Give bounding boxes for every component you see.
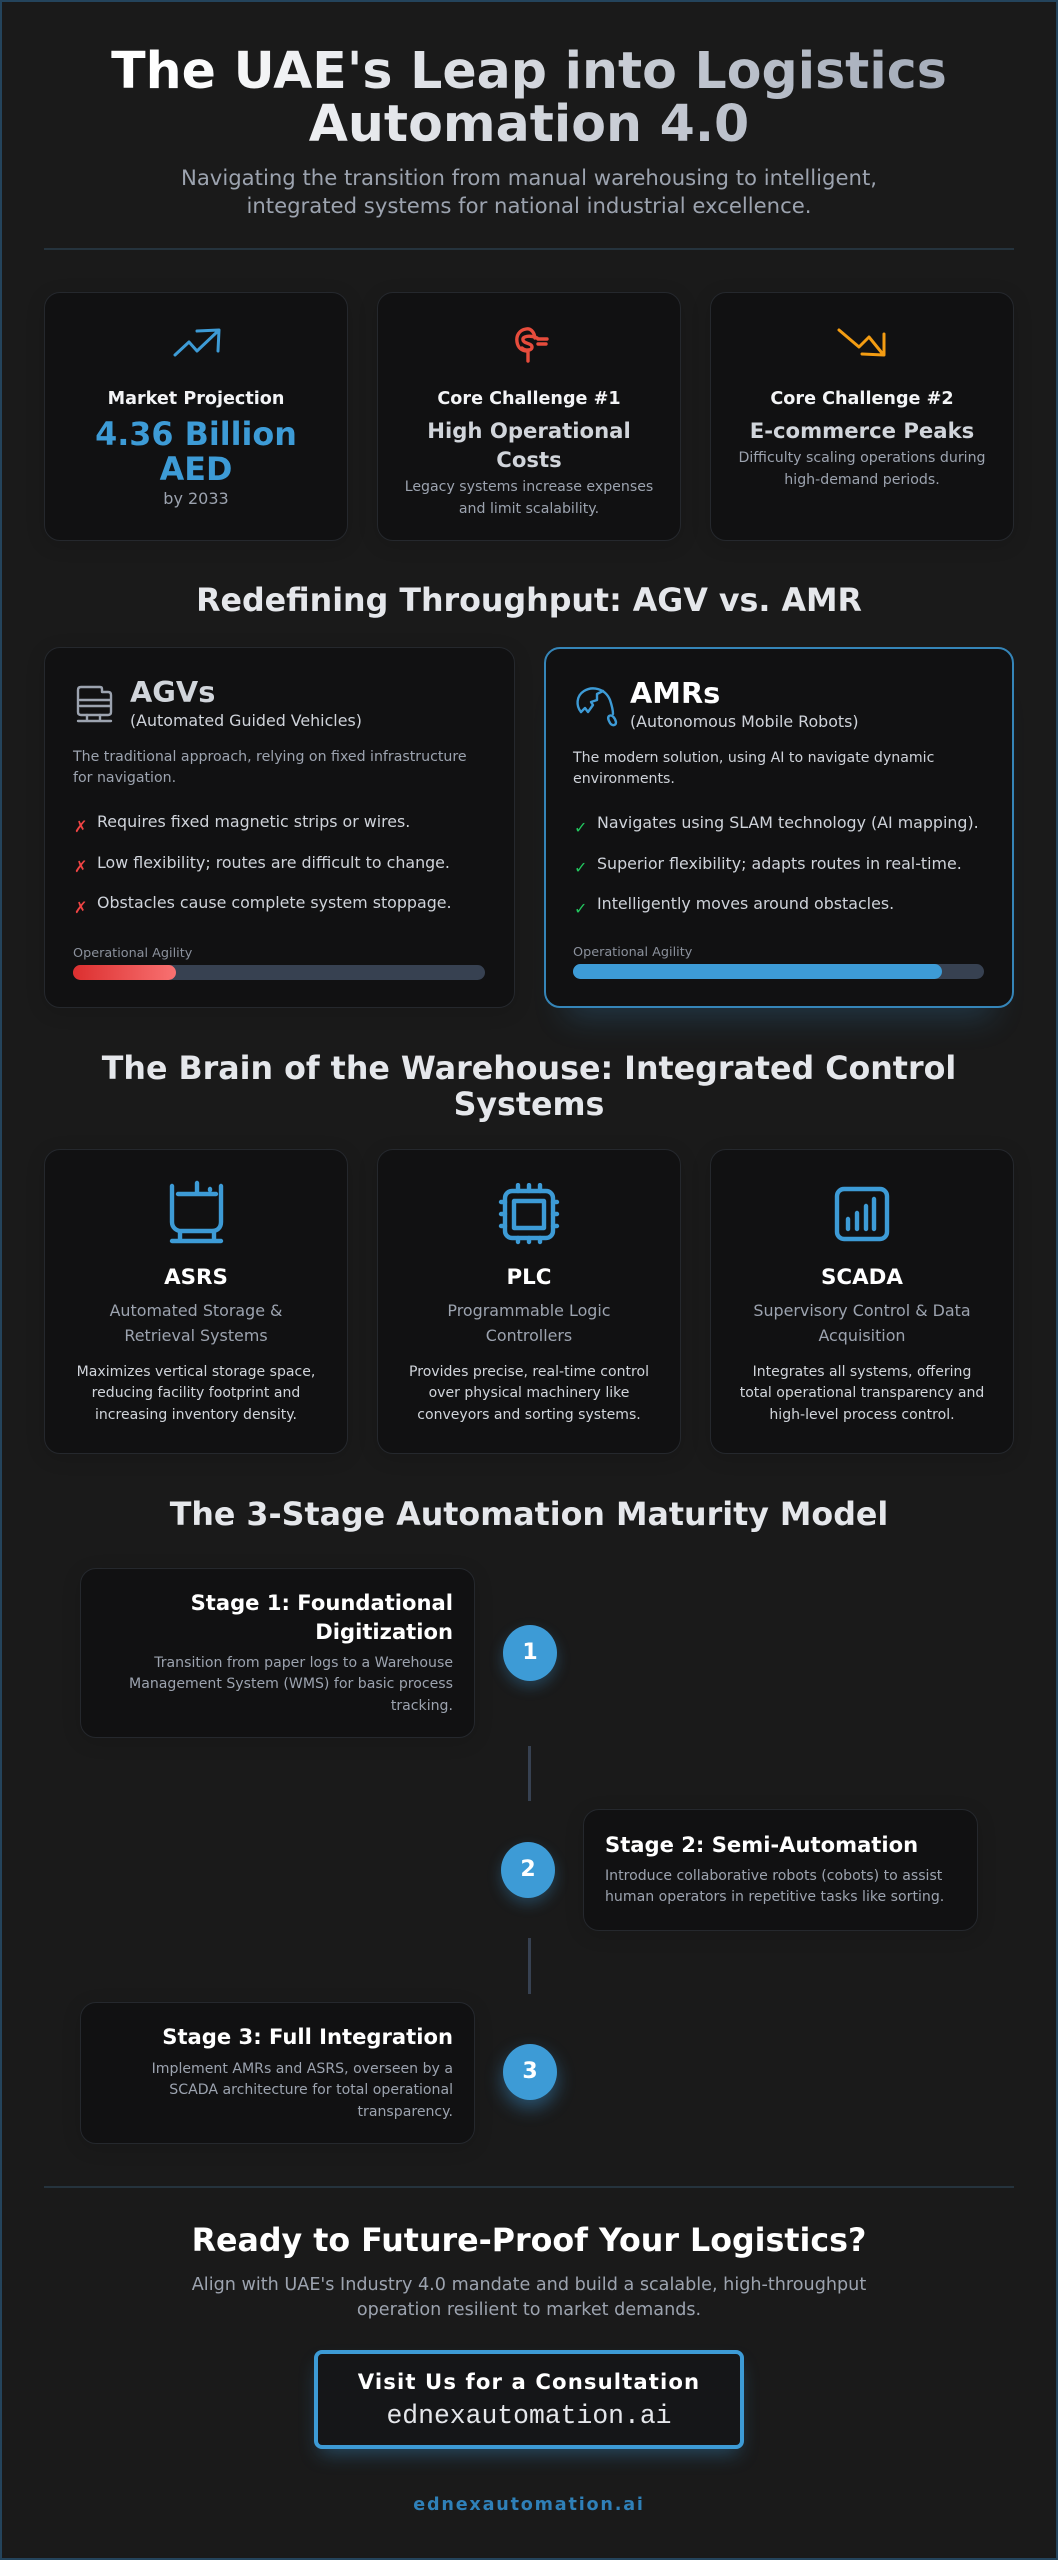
full name: (Automated Guided Vehicles) <box>130 711 362 730</box>
panel: stage 3 <box>80 2002 475 2144</box>
stage title <box>191 1590 453 1644</box>
description: Difficulty scaling operations during <box>738 450 986 466</box>
value: 4.36 Billion <box>95 416 297 453</box>
section: call to action <box>192 2223 866 2515</box>
list: limitations: Low flexibility; routes are difficult to change. <box>97 853 450 872</box>
icon: AGV <box>76 686 112 722</box>
panel: core challenge 2 <box>710 292 1014 541</box>
panel: AMRs <box>544 647 1014 1008</box>
list: benefits: ✓ <box>574 899 587 918</box>
icon: ASRS <box>170 1180 224 1244</box>
stage title: Stage 3: Full Integration <box>162 2024 453 2049</box>
CTA button <box>314 2350 744 2449</box>
heading: maturity model: The 3-Stage Automation Maturity Model <box>170 1497 888 1533</box>
full name: (Autonomous Mobile Robots) <box>630 712 859 731</box>
headline: Costs <box>496 447 562 472</box>
stage description: human operators in repetitive tasks like sorting. <box>605 1889 944 1905</box>
panel: ASRS <box>44 1149 348 1454</box>
description: for navigation. <box>73 770 176 786</box>
stage description: transparency. <box>358 2104 453 2120</box>
list: benefits: Navigates using SLAM technology (AI mapping). <box>597 813 979 832</box>
description <box>572 750 934 787</box>
CTA heading: Ready to Future-Proof Your Logistics? <box>192 2223 866 2259</box>
description <box>738 450 986 488</box>
description: The modern solution, using AI to navigate dynamic <box>573 750 934 766</box>
agility bar: Operational Agility <box>73 946 192 961</box>
icon: SCADA dashboard <box>834 1186 890 1242</box>
full name <box>753 1301 971 1345</box>
agility bar <box>573 945 984 979</box>
description: total operational transparency and <box>740 1385 984 1401</box>
heading: AGV vs AMR: Redefining Throughput: AGV vs. AMR <box>196 583 862 619</box>
name: SCADA <box>821 1265 903 1290</box>
list: limitations: Requires fixed magnetic strips or wires. <box>97 812 410 831</box>
list: benefits <box>574 813 979 918</box>
list: limitations: ✗ <box>74 857 87 876</box>
headline: High Operational <box>427 418 631 443</box>
description: high-demand periods. <box>784 472 940 488</box>
CTA text: operation resilient to market demands. <box>357 2300 701 2320</box>
full name: Controllers <box>486 1326 572 1345</box>
name: PLC <box>506 1265 552 1290</box>
title: Automation 4.0 <box>309 94 749 153</box>
heading: control systems: Systems <box>454 1087 604 1123</box>
panel: AGVs <box>44 647 515 1008</box>
description: Provides precise, real-time control <box>409 1364 649 1380</box>
stage description: Implement AMRs and ASRS, overseen by a <box>152 2061 453 2077</box>
list: limitations <box>74 812 452 917</box>
description: The traditional approach, relying on fixed infrastructure <box>73 749 467 765</box>
full name: Acquisition <box>818 1326 906 1345</box>
stage title: Stage 2: Semi-Automation <box>605 1832 918 1857</box>
full name <box>447 1301 611 1345</box>
heading: control systems <box>102 1051 956 1123</box>
list: benefits: Intelligently moves around obstacles. <box>597 894 894 913</box>
subtitle: Navigating the transition from manual warehousing to intelligent, <box>181 165 877 190</box>
list: limitations: Obstacles cause complete system stoppage. <box>97 893 452 912</box>
headline: E-commerce Peaks <box>750 418 974 443</box>
button label: Visit Us for a Consultation <box>358 2369 700 2394</box>
heading: control systems: The Brain of the Warehouse: Integrated Control <box>102 1051 956 1087</box>
description <box>77 1364 315 1423</box>
stage description: tracking. <box>391 1698 453 1714</box>
description <box>72 749 467 786</box>
list: benefits: ✓ <box>574 858 587 877</box>
stage description: Management System (WMS) for basic process <box>129 1676 453 1692</box>
button url: ednexautomation.ai <box>386 2401 672 2431</box>
label: Core Challenge #1 <box>437 389 621 409</box>
icon: AMR <box>576 687 618 726</box>
CTA text: Align with UAE's Industry 4.0 mandate and build a scalable, high-throughput <box>192 2275 866 2295</box>
header <box>111 41 947 218</box>
agility bar: Operational Agility <box>573 945 692 960</box>
list: limitations: ✗ <box>74 898 87 917</box>
icon: dollar cost <box>515 327 549 363</box>
description: reducing facility footprint and <box>92 1385 300 1401</box>
panel: market projection <box>44 292 348 541</box>
name: AGVs <box>130 675 215 709</box>
note: by 2033 <box>163 489 229 508</box>
full name: Retrieval Systems <box>124 1326 268 1345</box>
value <box>95 416 297 488</box>
stage title: Digitization <box>315 1619 453 1644</box>
stage description: Transition from paper logs to a Warehouse <box>154 1655 453 1671</box>
stage 1 number: 1 <box>522 1640 538 1665</box>
icon: trending up <box>173 328 220 357</box>
stage 3 number: 3 <box>522 2059 538 2084</box>
icon: PLC chip <box>498 1183 560 1244</box>
panel: PLC <box>377 1149 681 1454</box>
icon: trending down <box>837 328 886 356</box>
description: conveyors and sorting systems. <box>417 1407 641 1423</box>
stage 2 number <box>501 1842 555 1898</box>
CTA text <box>192 2275 866 2320</box>
stage title: Stage 1: Foundational <box>191 1590 453 1615</box>
title: The UAE's Leap into Logistics <box>111 41 947 100</box>
label: Core Challenge #2 <box>770 389 954 409</box>
description: Integrates all systems, offering <box>753 1364 971 1380</box>
description: increasing inventory density. <box>95 1407 297 1423</box>
description: over physical machinery like <box>429 1385 629 1401</box>
panel: stage 2 <box>583 1809 978 1931</box>
description: and limit scalability. <box>459 501 599 517</box>
description <box>409 1364 649 1423</box>
value: AED <box>160 451 232 488</box>
stage description: Introduce collaborative robots (cobots) to assist <box>605 1868 942 1884</box>
agility bar <box>73 946 485 980</box>
description: high-level process control. <box>769 1407 955 1423</box>
stage 1 number <box>503 1625 557 1681</box>
description <box>405 479 653 517</box>
name: AMRs <box>630 676 720 710</box>
panel: SCADA <box>710 1149 1014 1454</box>
full name: Programmable Logic <box>447 1301 611 1320</box>
stage 3 number <box>503 2044 557 2100</box>
description <box>740 1364 984 1423</box>
label: Market Projection <box>108 389 284 409</box>
description: Maximizes vertical storage space, <box>77 1364 315 1380</box>
stage 2 number: 2 <box>520 1857 536 1882</box>
stage description <box>605 1868 944 1905</box>
full name <box>110 1301 282 1345</box>
panel: core challenge 1 <box>377 292 681 541</box>
list: limitations: ✗ <box>74 817 87 836</box>
name: ASRS <box>164 1265 228 1290</box>
subtitle <box>181 165 877 218</box>
full name: Automated Storage & <box>110 1301 282 1320</box>
stage description <box>152 2061 453 2120</box>
description: environments. <box>573 771 675 787</box>
panel: stage 1 <box>80 1568 475 1738</box>
stage description: SCADA architecture for total operational <box>169 2082 453 2098</box>
subtitle: integrated systems for national industrial excellence. <box>246 193 812 218</box>
footer url: ednexautomation.ai <box>413 2495 645 2515</box>
stage description <box>129 1655 453 1714</box>
list: benefits: Superior flexibility; adapts routes in real-time. <box>597 854 962 873</box>
full name: Supervisory Control & Data <box>753 1301 971 1320</box>
title <box>0 44 1058 150</box>
description: Legacy systems increase expenses <box>405 479 653 495</box>
list: benefits: ✓ <box>574 818 587 837</box>
headline <box>427 418 631 472</box>
